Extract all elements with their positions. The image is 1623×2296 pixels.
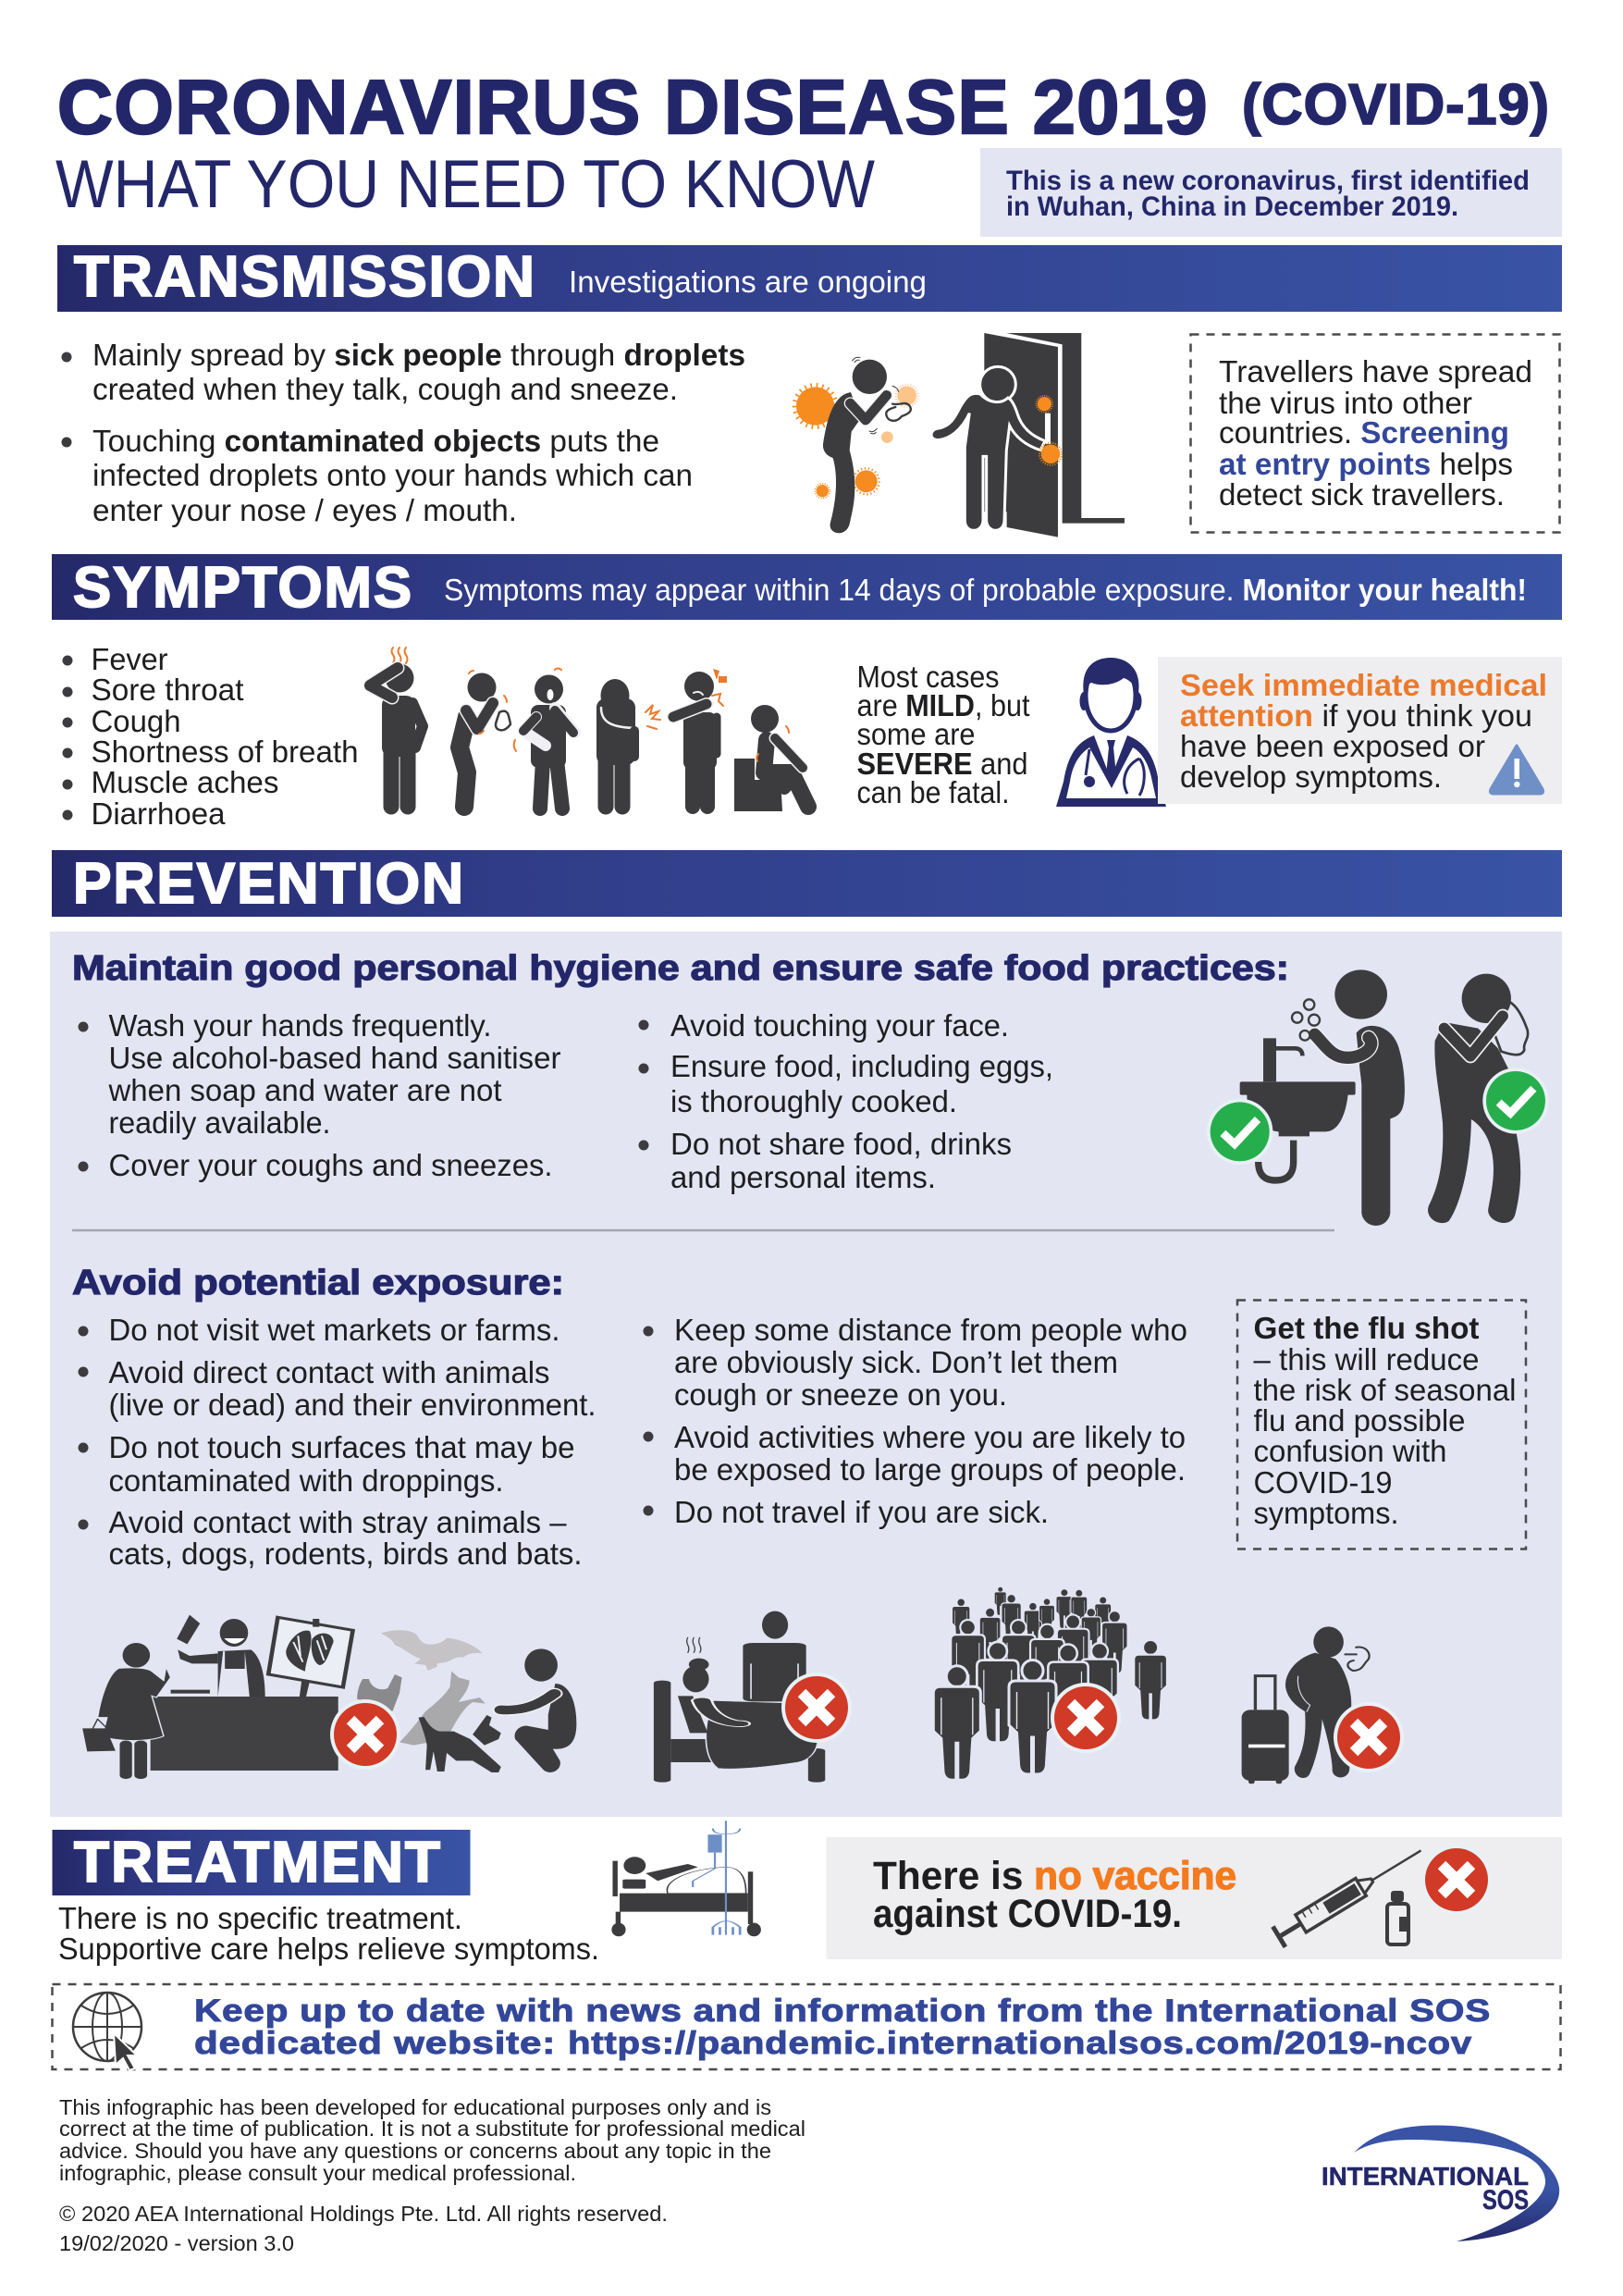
subtitle: WHAT YOU NEED TO KNOW	[55, 147, 875, 222]
icon: six symptom figures	[370, 648, 808, 811]
callout: flu shot: symptoms.	[1254, 1496, 1398, 1530]
exposure list left: cats, dogs, rodents, birds and bats.	[109, 1537, 583, 1571]
callout: flu shot	[1237, 1301, 1526, 1549]
callout: travellers	[1191, 335, 1559, 533]
icon: cough	[514, 668, 575, 809]
transmission text	[61, 338, 745, 527]
exposure list right: Keep some distance from people who	[674, 1313, 1187, 1347]
exposure list left: Avoid direct contact with animals	[109, 1355, 549, 1389]
transmission text: Mainly spread by sick people through droplets	[92, 338, 745, 372]
intro callout	[980, 148, 1562, 237]
section banner: prevention	[52, 850, 1562, 917]
callout: flu shot: Get the flu shot	[1254, 1311, 1480, 1345]
exposure list left: contaminated with droppings.	[109, 1463, 503, 1498]
hygiene list right	[638, 1008, 1053, 1194]
severity text: Most cases	[856, 660, 999, 694]
exposure list right: Avoid activities where you are likely to	[674, 1420, 1186, 1454]
icon: coughing person and door handle with virus	[794, 333, 1125, 537]
hygiene list right: Avoid touching your face.	[670, 1008, 1009, 1043]
hygiene list right: Do not share food, drinks	[670, 1127, 1012, 1161]
callout: travellers: Travellers have spread	[1219, 354, 1532, 389]
exposure list right: Do not travel if you are sick.	[674, 1495, 1049, 1529]
icon: crowd	[933, 1586, 1167, 1780]
disclaimer: correct at the time of publication. It is not a substitute for professional medical	[59, 2117, 805, 2141]
hygiene list right: is thoroughly cooked.	[670, 1084, 957, 1118]
hygiene list right: and personal items.	[670, 1160, 936, 1194]
treatment text: Supportive care helps relieve symptoms.	[58, 1932, 599, 1966]
website callout: https://pandemic.internationalsos.com/2019-ncov	[568, 2026, 1472, 2061]
callout: seek medical attention: attention if you think you	[1180, 698, 1532, 733]
disclaimer: 19/02/2020 - version 3.0	[59, 2231, 294, 2255]
website callout	[52, 1984, 1561, 2070]
logo: International SOS: SOS	[1482, 2185, 1529, 2216]
callout: travellers: countries. Screening	[1219, 415, 1509, 450]
hygiene list left: Cover your coughs and sneezes.	[109, 1148, 553, 1182]
exposure list left: (live or dead) and their environment.	[109, 1388, 596, 1422]
hygiene list left: when soap and water are not	[108, 1073, 501, 1107]
panel: prevention	[50, 932, 1562, 1817]
intro callout: in Wuhan, China in December 2019.	[1006, 191, 1458, 222]
callout: seek medical attention: develop symptoms.	[1180, 759, 1442, 794]
hygiene list left: Wash your hands frequently.	[109, 1008, 492, 1043]
section banner: treatment: TREATMENT	[74, 1831, 442, 1895]
website callout: dedicated website:	[194, 2026, 556, 2061]
callout: travellers: at entry points helps	[1219, 447, 1513, 481]
icon: warning triangle	[1490, 746, 1543, 794]
transmission text: infected droplets onto your hands which can	[92, 458, 693, 492]
callout: seek medical attention: have been exposed or	[1180, 729, 1485, 763]
exposure list right	[644, 1313, 1187, 1529]
severity text: SEVERE and	[856, 747, 1028, 781]
callout: travellers: detect sick travellers.	[1219, 477, 1505, 512]
icon: sore throat	[460, 671, 510, 807]
icon: wet market and animals	[82, 1615, 576, 1779]
section banner: prevention: PREVENTION	[73, 852, 465, 916]
treatment text: There is no specific treatment.	[58, 1901, 462, 1935]
symptoms list	[63, 642, 358, 831]
icon: diarrhoea	[734, 705, 808, 811]
icon: fever	[370, 648, 423, 807]
icon: patient in bed with IV	[611, 1821, 761, 1936]
title: CORONAVIRUS DISEASE 2019	[57, 64, 1209, 150]
logo: International SOS: INTERNATIONAL	[1322, 2162, 1529, 2191]
heading: hygiene: Maintain good personal hygiene and ensure safe food practices:	[72, 949, 1289, 988]
section banner: transmission	[57, 245, 1562, 312]
disclaimer: © 2020 AEA International Holdings Pte. Ltd. All rights reserved.	[59, 2202, 668, 2226]
treatment text	[58, 1901, 599, 1966]
icon: sick person in bed	[654, 1611, 852, 1783]
callout: travellers: the virus into other	[1219, 386, 1472, 420]
section banner: transmission: Investigations are ongoing	[569, 265, 927, 299]
exposure list left: Do not visit wet markets or farms.	[109, 1313, 560, 1347]
callout: flu shot: confusion with	[1254, 1434, 1446, 1468]
callout: flu shot: – this will reduce	[1254, 1342, 1480, 1376]
symptoms list: Cough	[91, 704, 181, 738]
callout: seek medical attention	[1158, 657, 1562, 804]
exposure list right: are obviously sick. Don’t let them	[674, 1345, 1118, 1379]
exposure list right: be exposed to large groups of people.	[674, 1452, 1186, 1487]
icon: globe with cursor	[73, 1993, 141, 2070]
disclaimer: This infographic has been developed for educational purposes only and is	[59, 2095, 771, 2119]
severity text: are MILD, but	[856, 688, 1030, 722]
section banner: symptoms: Symptoms may appear within 14 days of probable exposure. Monitor your health!	[444, 573, 1527, 607]
callout: no vaccine: There is no vaccine	[873, 1854, 1236, 1898]
disclaimer: infographic, please consult your medical professional.	[59, 2161, 576, 2185]
icon: shortness of breath	[596, 679, 660, 807]
disclaimer	[59, 2095, 805, 2255]
icon: doctor	[1056, 658, 1166, 807]
exposure list left: Avoid contact with stray animals –	[109, 1505, 567, 1539]
callout: flu shot: COVID-19	[1254, 1465, 1393, 1500]
hygiene list left	[78, 1008, 561, 1182]
callout: seek medical attention: Seek immediate medical	[1180, 668, 1547, 702]
transmission text: created when they talk, cough and sneeze.	[92, 372, 678, 406]
callout: flu shot: flu and possible	[1254, 1403, 1465, 1438]
exposure list left: Do not touch surfaces that may be	[109, 1430, 575, 1464]
icon: sick traveller	[1242, 1626, 1404, 1784]
exposure list right: cough or sneeze on you.	[674, 1377, 1007, 1412]
section banner: transmission: TRANSMISSION	[74, 245, 536, 309]
section banner: symptoms: SYMPTOMS	[73, 556, 413, 620]
hygiene list right: Ensure food, including eggs,	[670, 1049, 1053, 1083]
icon: muscle aches	[673, 669, 727, 807]
transmission text: enter your nose / eyes / mouth.	[92, 493, 517, 527]
hygiene list left: Use alcohol-based hand sanitiser	[109, 1041, 561, 1075]
intro callout: This is a new coronavirus, first identified	[1006, 166, 1530, 196]
callout: flu shot: the risk of seasonal	[1254, 1373, 1517, 1407]
logo: International SOS	[1322, 2126, 1559, 2241]
callout: no vaccine: against COVID-19.	[873, 1892, 1182, 1936]
severity text: can be fatal.	[856, 775, 1010, 809]
hygiene list left: readily available.	[109, 1105, 331, 1140]
section banner: symptoms	[52, 554, 1562, 620]
callout: no vaccine	[827, 1837, 1562, 1959]
symptoms list: Muscle aches	[91, 765, 279, 799]
disclaimer: advice. Should you have any questions or concerns about any topic in the	[59, 2139, 771, 2163]
severity text: some are	[856, 717, 975, 751]
transmission text: Touching contaminated objects puts the	[92, 424, 659, 458]
symptoms list: Shortness of breath	[91, 734, 358, 769]
heading: avoid exposure: Avoid potential exposure:	[72, 1264, 564, 1302]
symptoms list: Diarrhoea	[91, 796, 226, 831]
icon: hand washing and cough etiquette	[1207, 969, 1549, 1226]
symptoms list: Sore throat	[91, 673, 244, 707]
title suffix: (COVID-19)	[1242, 73, 1550, 137]
website callout: Keep up to date with news and information from the International SOS	[194, 1994, 1491, 2029]
symptoms list: Fever	[91, 642, 168, 676]
icon: syringe and vial	[1271, 1840, 1427, 1948]
exposure list left	[78, 1313, 596, 1571]
severity text	[856, 660, 1030, 809]
